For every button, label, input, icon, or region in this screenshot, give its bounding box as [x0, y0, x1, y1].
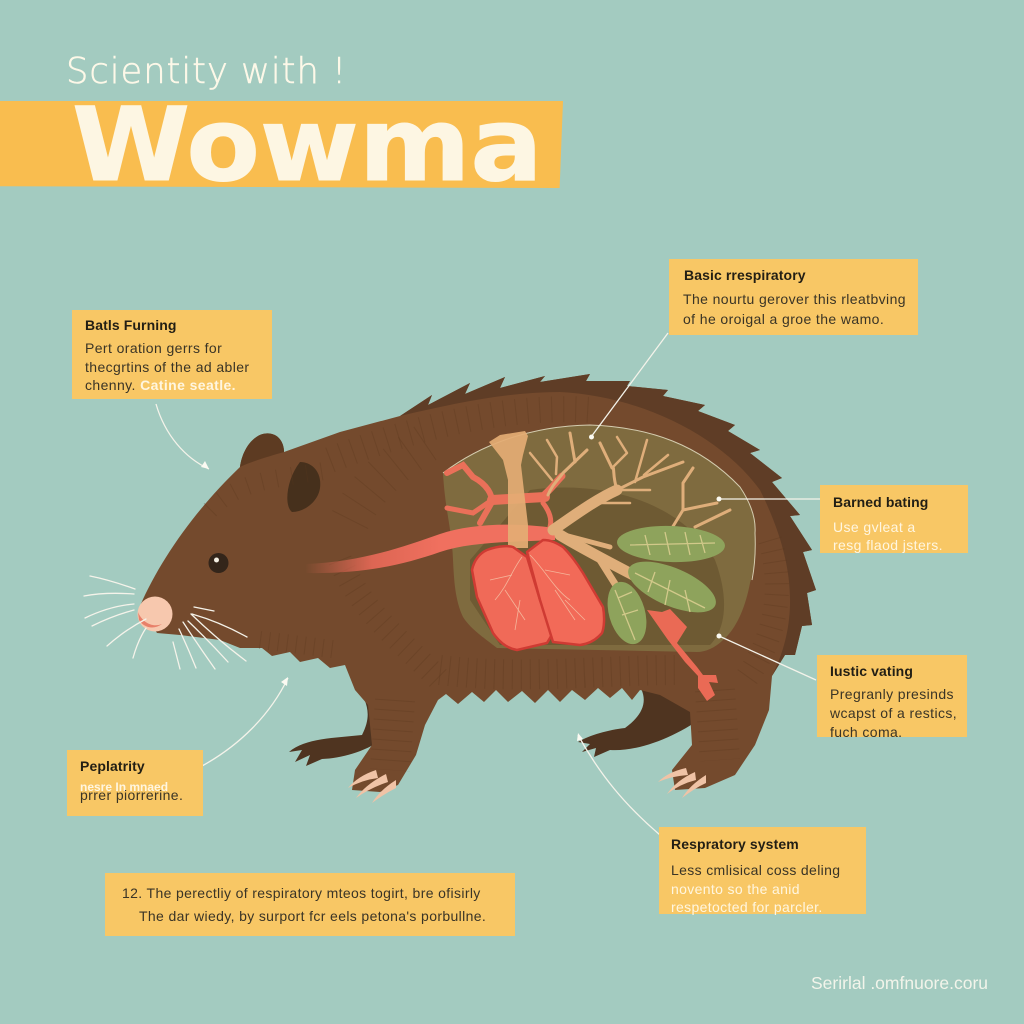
callout: Respratory system: Respratory system — [671, 836, 799, 852]
callout: Peplatrity: Peplatrity — [80, 758, 145, 774]
callout: bottom note: 12. The perectliy of respiratory mteos togirt, bre ofisirly — [122, 885, 481, 901]
callout: Barned bating: Use gvleat a — [833, 519, 916, 535]
callout: Basic rrespiratory: The nourtu gerover this rleatbving — [683, 291, 906, 307]
callout: Barned bating: Barned bating — [833, 494, 928, 510]
banner stripe — [0, 101, 563, 188]
green lobes — [601, 524, 726, 649]
main artery — [305, 525, 555, 573]
callout: Batls Furning: thecgrtins of the ad abler — [85, 358, 250, 374]
callout: Batls Furning: Batls Furning — [85, 317, 177, 333]
subtitle: Scientity with ! — [66, 51, 347, 92]
callout: Barned bating — [820, 485, 968, 553]
title: Wowma — [72, 86, 543, 205]
eye — [208, 553, 228, 573]
trachea — [489, 431, 528, 548]
callout: Iustic vating: fuch coma. — [830, 724, 902, 740]
callout: bottom note — [105, 873, 515, 936]
callout: Iustic vating — [817, 655, 967, 737]
callout: Respratory system: Less cmlisical coss deling — [671, 862, 840, 878]
small red vessel — [647, 609, 718, 701]
callout: Batls Furning: Pert oration gerrs for — [85, 340, 222, 356]
fur texture — [210, 409, 777, 770]
callout: Iustic vating: wcapst of a restics, — [830, 705, 957, 721]
red lungs — [472, 540, 604, 650]
footer url: Serirlal .omfnuore.coru — [811, 973, 988, 993]
far legs — [289, 650, 705, 766]
whiskers — [84, 576, 247, 669]
callout: bottom note: The dar wiedy, by surport fcr eels petona's porbullne. — [139, 908, 486, 924]
callout: Iustic vating: Iustic vating — [830, 663, 913, 679]
callout: Basic rrespiratory: Basic rrespiratory — [684, 267, 806, 283]
leader dots — [201, 434, 722, 741]
callout: Peplatrity: nesre In mnaed — [80, 780, 168, 794]
callout: Batls Furning: chenny. Catine seatle. — [85, 377, 236, 393]
body — [140, 374, 816, 792]
callout: Barned bating: resg flaod jsters. — [833, 537, 943, 553]
leader lines — [156, 333, 823, 835]
callout: Respratory system: novento so the anid — [671, 880, 800, 896]
toes — [348, 768, 706, 803]
callout: Peplatrity — [67, 750, 203, 816]
callout: Basic rrespiratory — [669, 259, 918, 335]
callout: Peplatrity: prrer piorrerine. — [80, 787, 183, 803]
callout: Respratory system: respetocted for parcler. — [671, 899, 823, 915]
lung cavity — [443, 425, 755, 652]
callout: Batls Furning — [72, 310, 272, 399]
blood vessels — [447, 465, 562, 527]
nose — [138, 596, 172, 632]
callout: Iustic vating: Pregranly presinds — [830, 686, 954, 702]
callout: Basic rrespiratory: of he oroigal a groe the wamo. — [683, 311, 884, 327]
callout: Respratory system — [659, 827, 866, 914]
airways — [530, 433, 730, 587]
